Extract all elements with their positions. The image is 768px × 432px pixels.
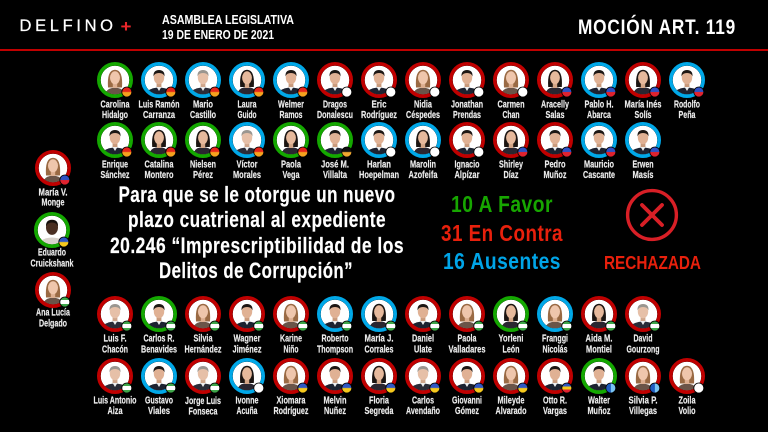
deputy: Paola Valladares <box>448 298 486 356</box>
deputy: María J. Corrales: María J. <box>364 332 394 344</box>
deputy: Rodolfo Peña: Rodolfo <box>674 98 700 110</box>
deputy: Floria Segreda <box>363 360 396 417</box>
deputy: Wagner Jiménez <box>231 298 264 356</box>
deputy: Karine Niño: Karine <box>280 332 302 344</box>
deputy: Pedro Muñoz <box>539 124 572 181</box>
deputy: Shirley Díaz: Díaz <box>503 169 519 181</box>
deputy: Mario Castillo: Castillo <box>190 109 216 121</box>
deputy: Carolina Hidalgo <box>99 64 132 121</box>
deputy: Melvin Nuñez: Nuñez <box>324 405 346 417</box>
deputy: Mauricio Cascante <box>583 124 616 181</box>
deputy: Jonathan Prendas <box>451 64 484 121</box>
result label: rejected: RECHAZADA <box>604 253 701 273</box>
deputy: Luis Antonio Aiza: Aiza <box>107 405 123 417</box>
deputy: Marolin Azofeifa: Marolin <box>410 158 436 170</box>
deputy: Carlos R. Benavides <box>141 298 177 356</box>
deputy: Aracelly Salas: Aracelly <box>541 98 569 110</box>
deputy: Giovanni Gómez: Gómez <box>455 405 479 417</box>
deputy: Welmer Ramos: Ramos <box>280 109 303 121</box>
deputy: Melvin Nuñez: Melvin <box>324 394 346 406</box>
deputy: Dragos Donalescu: Dragos <box>323 98 347 110</box>
deputy: Víctor Morales <box>231 124 264 181</box>
deputy: Silvia P. Villegas: Villegas <box>629 405 657 417</box>
deputy: Carolina Hidalgo: Hidalgo <box>102 109 128 121</box>
deputy: Giovanni Gómez <box>451 360 484 417</box>
deputy: Carolina Hidalgo: Carolina <box>100 98 130 110</box>
deputy: Franggi Nicolás: Franggi <box>542 332 568 344</box>
deputy: Laura Guido: Laura <box>238 98 257 110</box>
deputy: Ana Lucía Delgado: Ana Lucía <box>36 306 70 318</box>
deputy: Mario Castillo: Mario <box>193 98 213 110</box>
motion description text: 20.246 “Imprescriptibilidad de los <box>110 233 404 258</box>
header: event and date <box>162 12 295 42</box>
deputy: Carlos Avendaño: Carlos <box>412 394 434 406</box>
motion description text <box>110 182 404 283</box>
deputy: Walter Muñoz: Walter <box>588 394 610 406</box>
deputy: Zoila Volio: Volio <box>678 405 696 417</box>
deputy: Aida M. Montiel: Montiel <box>586 344 612 356</box>
header divider <box>0 49 768 51</box>
vote tally <box>441 191 563 274</box>
deputy: Zoila Volio: Zoila <box>678 394 696 406</box>
deputy: Mario Castillo <box>187 64 220 121</box>
deputy: Rodolfo Peña: Peña <box>678 109 696 121</box>
deputy: Harlan Hoepelman: Hoepelman <box>359 169 399 181</box>
deputy: Eric Rodríguez <box>361 64 397 121</box>
deputy: Nidia Céspedes: Céspedes <box>406 109 440 121</box>
tally: against: 31 En Contra <box>441 220 563 246</box>
deputy: Aida M. Montiel: Aida M. <box>586 332 613 344</box>
deputy: Paola Valladares: Valladares <box>448 344 486 356</box>
deputy: Roberto Thompson <box>317 298 353 356</box>
tally: in favour: 10 A Favor <box>451 191 553 217</box>
deputy: Paola Vega: Vega <box>282 169 300 181</box>
deputy: Paola Vega <box>275 124 308 181</box>
deputy: Aracelly Salas: Salas <box>546 109 565 121</box>
deputy: Jonathan Prendas: Prendas <box>453 109 481 121</box>
icon: rejected X in circle <box>628 191 676 239</box>
deputy: Otto R. Vargas <box>539 360 572 417</box>
deputy: Gustavo Viales: Viales <box>148 405 170 417</box>
deputy: María V. Monge: María V. <box>39 186 68 198</box>
deputy: Harlan Hoepelman <box>359 124 399 181</box>
deputy: Zoila Volio <box>671 360 704 417</box>
deputy: David Gourzong: Gourzong <box>626 344 660 356</box>
deputy: Catalina Montero <box>143 124 176 181</box>
deputy: Carlos R. Benavides: Benavides <box>141 344 177 356</box>
deputy: Pablo H. Abarca: Pablo H. <box>584 98 614 110</box>
deputy: David Gourzong: David <box>634 332 652 344</box>
deputy: Shirley Díaz <box>495 124 528 181</box>
deputy: Roberto Thompson: Thompson <box>317 344 353 356</box>
deputy: Erwen Masís: Erwen <box>632 158 654 170</box>
deputy: Yorleni León <box>495 298 528 356</box>
deputy: Pedro Muñoz: Muñoz <box>544 169 566 181</box>
deputy: Dragos Donalescu <box>317 64 353 121</box>
deputy: José M. Villalta: Villalta <box>323 169 347 181</box>
header: Delfino+ logo: + <box>120 17 132 36</box>
deputy: Karine Niño <box>275 298 308 356</box>
deputy: Marolin Azofeifa <box>407 124 440 181</box>
deputy: Aida M. Montiel <box>583 298 616 356</box>
deputy: Catalina Montero: Montero <box>144 169 174 181</box>
deputy: Erwen Masís: Masís <box>632 169 654 181</box>
deputy: Jorge Luis Fonseca: Jorge Luis <box>185 395 221 407</box>
deputy: Eric Rodríguez: Rodríguez <box>361 109 397 121</box>
deputy: Luis Ramón Carranza: Luis Ramón <box>138 98 180 110</box>
deputy: Nielsen Pérez: Pérez <box>193 169 213 181</box>
deputy: Carmen Chan: Carmen <box>498 98 524 110</box>
deputy: Eric Rodríguez: Eric <box>372 98 387 110</box>
deputy: José M. Villalta: José M. <box>321 158 349 170</box>
deputy: Ignacio Alpízar <box>451 124 484 181</box>
deputy: Nidia Céspedes: Nidia <box>414 98 432 110</box>
deputy: Víctor Morales: Víctor <box>236 158 258 170</box>
deputy: Carmen Chan <box>495 64 528 121</box>
deputy: Ana Lucía Delgado <box>36 274 70 330</box>
deputy: Ignacio Alpízar: Alpízar <box>454 169 480 181</box>
deputy: Luis F. Chacón: Chacón <box>102 344 128 356</box>
deputy: Otto R. Vargas: Otto R. <box>543 394 567 406</box>
deputy: Walter Muñoz <box>583 360 616 417</box>
deputy: Ignacio Alpízar: Ignacio <box>454 158 480 170</box>
deputy: Eduardo Cruickshank: Cruickshank <box>30 258 74 270</box>
deputy: Nielsen Pérez <box>187 124 220 181</box>
deputy: Paola Vega: Paola <box>281 158 301 170</box>
deputy: Yorleni León: Yorleni <box>498 332 524 344</box>
deputy: Marolin Azofeifa: Azofeifa <box>409 169 438 181</box>
deputy: Silvia Hernández: Hernández <box>184 344 222 356</box>
deputy: Nielsen Pérez: Nielsen <box>190 158 216 170</box>
deputy: Enrique Sánchez: Sánchez <box>100 169 130 181</box>
deputy: Giovanni Gómez: Giovanni <box>452 394 482 406</box>
deputy: Silvia P. Villegas: Silvia P. <box>628 394 658 406</box>
deputy: Luis F. Chacón <box>99 298 132 356</box>
deputy: Shirley Díaz: Shirley <box>499 158 523 170</box>
header: event and date: ASAMBLEA LEGISLATIVA <box>162 12 295 27</box>
deputy: Welmer Ramos <box>275 64 308 121</box>
deputy: María J. Corrales: Corrales <box>364 344 394 356</box>
deputy: José M. Villalta <box>319 124 352 181</box>
deputy: Pablo H. Abarca <box>583 64 616 121</box>
deputy: Eduardo Cruickshank <box>30 214 74 270</box>
deputy: Daniel Ulate: Ulate <box>414 344 432 356</box>
deputy: David Gourzong <box>626 298 660 356</box>
deputy: Mileyde Alvarado: Alvarado <box>496 405 526 417</box>
deputy: Wagner Jiménez: Wagner <box>234 332 260 344</box>
deputy: Carlos Avendaño: Avendaño <box>406 405 440 417</box>
deputy: Franggi Nicolás: Nicolás <box>542 344 568 356</box>
deputy: Floria Segreda: Floria <box>369 394 389 406</box>
deputy: Ivonne Acuña <box>231 360 264 417</box>
deputy: Pedro Muñoz: Pedro <box>544 158 566 170</box>
deputy: Ana Lucía Delgado: Delgado <box>39 318 67 330</box>
deputy: Mauricio Cascante: Cascante <box>583 169 615 181</box>
deputy: Luis Antonio Aiza <box>94 360 136 417</box>
deputy: Nidia Céspedes <box>406 64 440 121</box>
deputy: Eduardo Cruickshank: Eduardo <box>38 246 66 258</box>
deputy: Paola Valladares: Paola <box>458 332 477 344</box>
deputy: Carmen Chan: Chan <box>502 109 520 121</box>
deputy: Franggi Nicolás <box>539 298 572 356</box>
deputy: María V. Monge <box>37 152 70 208</box>
deputy: Silvia Hernández: Silvia <box>194 332 213 344</box>
deputy: Ivonne Acuña: Acuña <box>236 405 258 417</box>
deputy: Mauricio Cascante: Mauricio <box>584 158 614 170</box>
deputy: Mileyde Alvarado: Mileyde <box>498 394 525 406</box>
deputy: Yorleni León: León <box>502 344 520 356</box>
deputy: Daniel Ulate: Daniel <box>412 332 434 344</box>
deputy: Walter Muñoz: Muñoz <box>588 405 610 417</box>
deputy: Víctor Morales: Morales <box>233 169 261 181</box>
deputy: María Inés Solís: María Inés <box>624 98 662 110</box>
deputy: Gustavo Viales: Gustavo <box>145 394 173 406</box>
deputy: Karine Niño: Niño <box>284 344 298 356</box>
deputy: Luis F. Chacón: Luis F. <box>104 332 127 344</box>
deputy: Xiomara Rodríguez: Xiomara <box>276 394 306 406</box>
deputy: Daniel Ulate <box>407 298 440 356</box>
deputy: Jonathan Prendas: Jonathan <box>451 98 483 110</box>
deputy: Roberto Thompson: Roberto <box>321 332 349 344</box>
motion description text: Para que se le otorgue un nuevo <box>118 182 396 207</box>
deputy: María Inés Solís <box>624 64 662 121</box>
deputy: Gustavo Viales <box>143 360 176 417</box>
deputy: María V. Monge: Monge <box>42 196 65 208</box>
deputy: Mileyde Alvarado <box>495 360 528 417</box>
deputy: Carlos Avendaño <box>406 360 440 417</box>
deputy: Luis Ramón Carranza: Carranza <box>143 109 175 121</box>
deputy: Jorge Luis Fonseca: Fonseca <box>188 406 218 418</box>
deputy: Ivonne Acuña: Ivonne <box>236 394 259 406</box>
deputy: Welmer Ramos: Welmer <box>278 98 304 110</box>
deputy: Melvin Nuñez <box>319 360 352 417</box>
deputy: Erwen Masís <box>627 124 660 181</box>
deputy: María J. Corrales <box>363 298 396 356</box>
deputy: María Inés Solís: Solís <box>634 109 652 121</box>
deputy: Xiomara Rodríguez <box>274 360 308 417</box>
deputy: Wagner Jiménez: Jiménez <box>232 344 262 356</box>
deputy: Rodolfo Peña <box>671 64 704 121</box>
deputy: Aracelly Salas <box>539 64 572 121</box>
deputy: Harlan Hoepelman: Harlan <box>367 158 391 170</box>
deputy: Otto R. Vargas: Vargas <box>543 405 567 417</box>
header: event and date: 19 DE ENERO DE 2021 <box>162 27 274 42</box>
deputy: Silvia Hernández <box>184 298 222 356</box>
deputy: Enrique Sánchez: Enrique <box>102 158 128 170</box>
deputy: Silvia P. Villegas <box>627 360 660 417</box>
deputy: Enrique Sánchez <box>99 124 132 181</box>
deputy: Luis Ramón Carranza <box>138 64 180 121</box>
deputy: Luis Antonio Aiza: Luis Antonio <box>94 394 136 406</box>
deputy: Xiomara Rodríguez: Rodríguez <box>274 405 308 417</box>
tally: absent: 16 Ausentes <box>443 248 561 274</box>
deputy: Dragos Donalescu: Donalescu <box>317 109 353 121</box>
deputy: Laura Guido: Guido <box>238 109 256 121</box>
header: Delfino+ logo: DELFINO <box>20 17 113 35</box>
motion description text: Delitos de Corrupción” <box>159 258 353 283</box>
motion description text: plazo cuatrienal al expediente <box>128 207 386 232</box>
deputy: Pablo H. Abarca: Abarca <box>587 109 611 121</box>
deputy: Catalina Montero: Catalina <box>144 158 174 170</box>
deputy: Laura Guido <box>231 64 264 121</box>
deputy: Floria Segreda: Segreda <box>364 405 394 417</box>
deputy: Carlos R. Benavides: Carlos R. <box>144 332 175 344</box>
deputy: Jorge Luis Fonseca <box>185 360 221 418</box>
